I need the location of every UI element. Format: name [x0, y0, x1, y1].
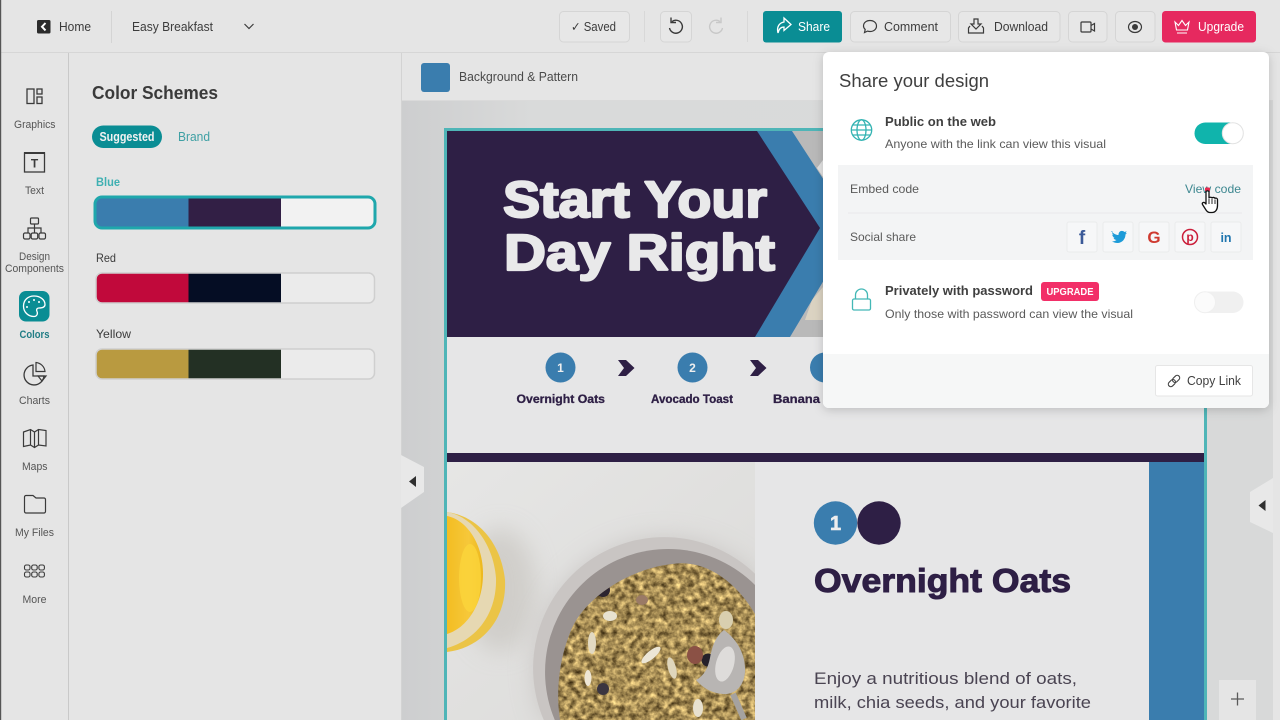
- share popup: [823, 52, 1269, 408]
- copy link button: [1156, 366, 1252, 396]
- header banner: [447, 131, 855, 337]
- share button: Share: [798, 20, 830, 34]
- social: twitter: [1103, 222, 1133, 252]
- popup heading: Share your design: [839, 71, 989, 91]
- step 2: [651, 352, 733, 406]
- saved button: ✓ Saved: [571, 20, 616, 34]
- arrow: [618, 360, 634, 376]
- upgrade badge: [1041, 282, 1099, 301]
- design components tool: Components: [5, 263, 64, 275]
- main title: Day Right: [504, 224, 775, 281]
- step description: Enjoy a nutritious blend of oats,: [814, 670, 1077, 688]
- background and pattern bar: [402, 53, 1280, 101]
- public option: [851, 114, 1244, 151]
- saved button: [560, 12, 630, 42]
- public option: Public on the web: [885, 114, 996, 129]
- social: pinterest: [1175, 222, 1205, 252]
- tab: suggested: [92, 126, 162, 148]
- step 1: 1: [557, 361, 564, 375]
- step 2: Avocado Toast: [651, 394, 733, 406]
- step detail panel: [755, 462, 1149, 720]
- my files tool: [15, 496, 54, 539]
- step 3: Banana: [773, 394, 821, 406]
- tab: suggested: Suggested: [100, 130, 154, 144]
- panel: color schemes: [69, 53, 402, 720]
- step description: [814, 670, 1091, 712]
- colors tool, active: [19, 291, 50, 341]
- upgrade button: Upgrade: [1198, 20, 1244, 34]
- private option: Only those with password can view the visual: [885, 307, 1133, 321]
- main title: Start Your: [503, 171, 767, 228]
- comment button: [850, 12, 950, 42]
- social: linkedin: in: [1220, 231, 1232, 245]
- private option: Privately with password: [885, 283, 1033, 298]
- private option: [852, 282, 1244, 321]
- redo button: [710, 18, 722, 33]
- social share label: Social share: [850, 230, 916, 244]
- top toolbar: [0, 0, 1280, 54]
- scheme: blue: Blue: [96, 175, 120, 189]
- step 2: 2: [689, 361, 696, 375]
- blue side column: [1149, 462, 1204, 720]
- number circles: [814, 501, 901, 545]
- steps row: [516, 352, 840, 406]
- step 3: [773, 352, 840, 406]
- left icon rail: [0, 0, 69, 720]
- copy link button: Copy Link: [1187, 374, 1242, 388]
- graphics tool: [14, 89, 56, 131]
- right collapse handle: [1250, 478, 1273, 533]
- tab: brand: Brand: [178, 130, 210, 144]
- more tool: More: [22, 594, 46, 606]
- zoom plus button: [1219, 680, 1256, 720]
- preview button: [1116, 12, 1155, 42]
- divider bar: [447, 453, 1204, 462]
- photo: granola bowl and juice: [447, 462, 755, 720]
- step description: milk, chia seeds, and your favorite: [814, 694, 1091, 712]
- social: facebook: [1067, 222, 1097, 252]
- arrow: [750, 360, 766, 376]
- step heading: Overnight Oats: [814, 562, 1071, 599]
- toggle off: [1194, 292, 1244, 313]
- background label: Background & Pattern: [459, 70, 578, 84]
- mouse cursor: [1202, 188, 1218, 212]
- home link: Home: [59, 19, 91, 34]
- canvas area background: [402, 100, 1273, 720]
- more tool: [22, 565, 46, 606]
- social: google: G: [1147, 228, 1161, 247]
- social: facebook: f: [1079, 228, 1086, 249]
- upgrade badge: UPGRADE: [1046, 286, 1094, 298]
- comment button: Comment: [884, 20, 939, 34]
- infographic page: [446, 130, 1206, 720]
- number circles: 1: [830, 513, 841, 535]
- maps tool: Maps: [22, 461, 48, 473]
- left collapse handle: [401, 455, 424, 508]
- scheme: yellow: Yellow: [96, 327, 131, 341]
- upgrade button: [1162, 11, 1256, 42]
- design components tool: [5, 218, 64, 275]
- social: linkedin: [1211, 222, 1241, 252]
- step 1: Overnight Oats: [516, 394, 605, 406]
- design components tool: Design: [19, 251, 50, 263]
- video button: [1068, 12, 1107, 42]
- background swatch: [421, 63, 450, 92]
- text tool: T: [31, 156, 39, 170]
- home link: [37, 19, 91, 34]
- charts tool: Charts: [19, 395, 50, 407]
- icon: globe: [851, 120, 872, 140]
- embed code row: Embed code: [850, 182, 919, 196]
- scheme: red: [96, 251, 374, 303]
- scheme: red: Red: [96, 251, 116, 265]
- icon: lock: [852, 289, 870, 310]
- step 1: [516, 352, 605, 406]
- share button: [763, 11, 842, 42]
- maps tool: [22, 430, 48, 473]
- document name: Easy Breakfast: [132, 19, 213, 34]
- public option: Anyone with the link can view this visual: [885, 137, 1106, 151]
- graphics tool: Graphics: [14, 119, 56, 131]
- colors tool, active: Colors: [20, 329, 50, 341]
- right edge panel: [1273, 100, 1280, 720]
- toggle on: [1194, 122, 1244, 144]
- my files tool: My Files: [15, 527, 54, 539]
- popup footer band: [823, 354, 1269, 408]
- charts tool: [19, 362, 50, 407]
- view code link: View code: [1185, 182, 1241, 196]
- main title: [503, 171, 775, 281]
- scheme: blue: [95, 175, 375, 228]
- text tool: Text: [25, 185, 44, 197]
- download button: [958, 12, 1060, 42]
- social: pinterest: p: [1186, 230, 1194, 244]
- download button: Download: [994, 20, 1048, 34]
- undo button: [660, 12, 692, 42]
- embed and social section: [838, 165, 1253, 260]
- panel heading: Color Schemes: [92, 83, 218, 103]
- scheme: yellow: [96, 327, 374, 379]
- social: google: [1139, 222, 1169, 252]
- text tool: [24, 152, 45, 197]
